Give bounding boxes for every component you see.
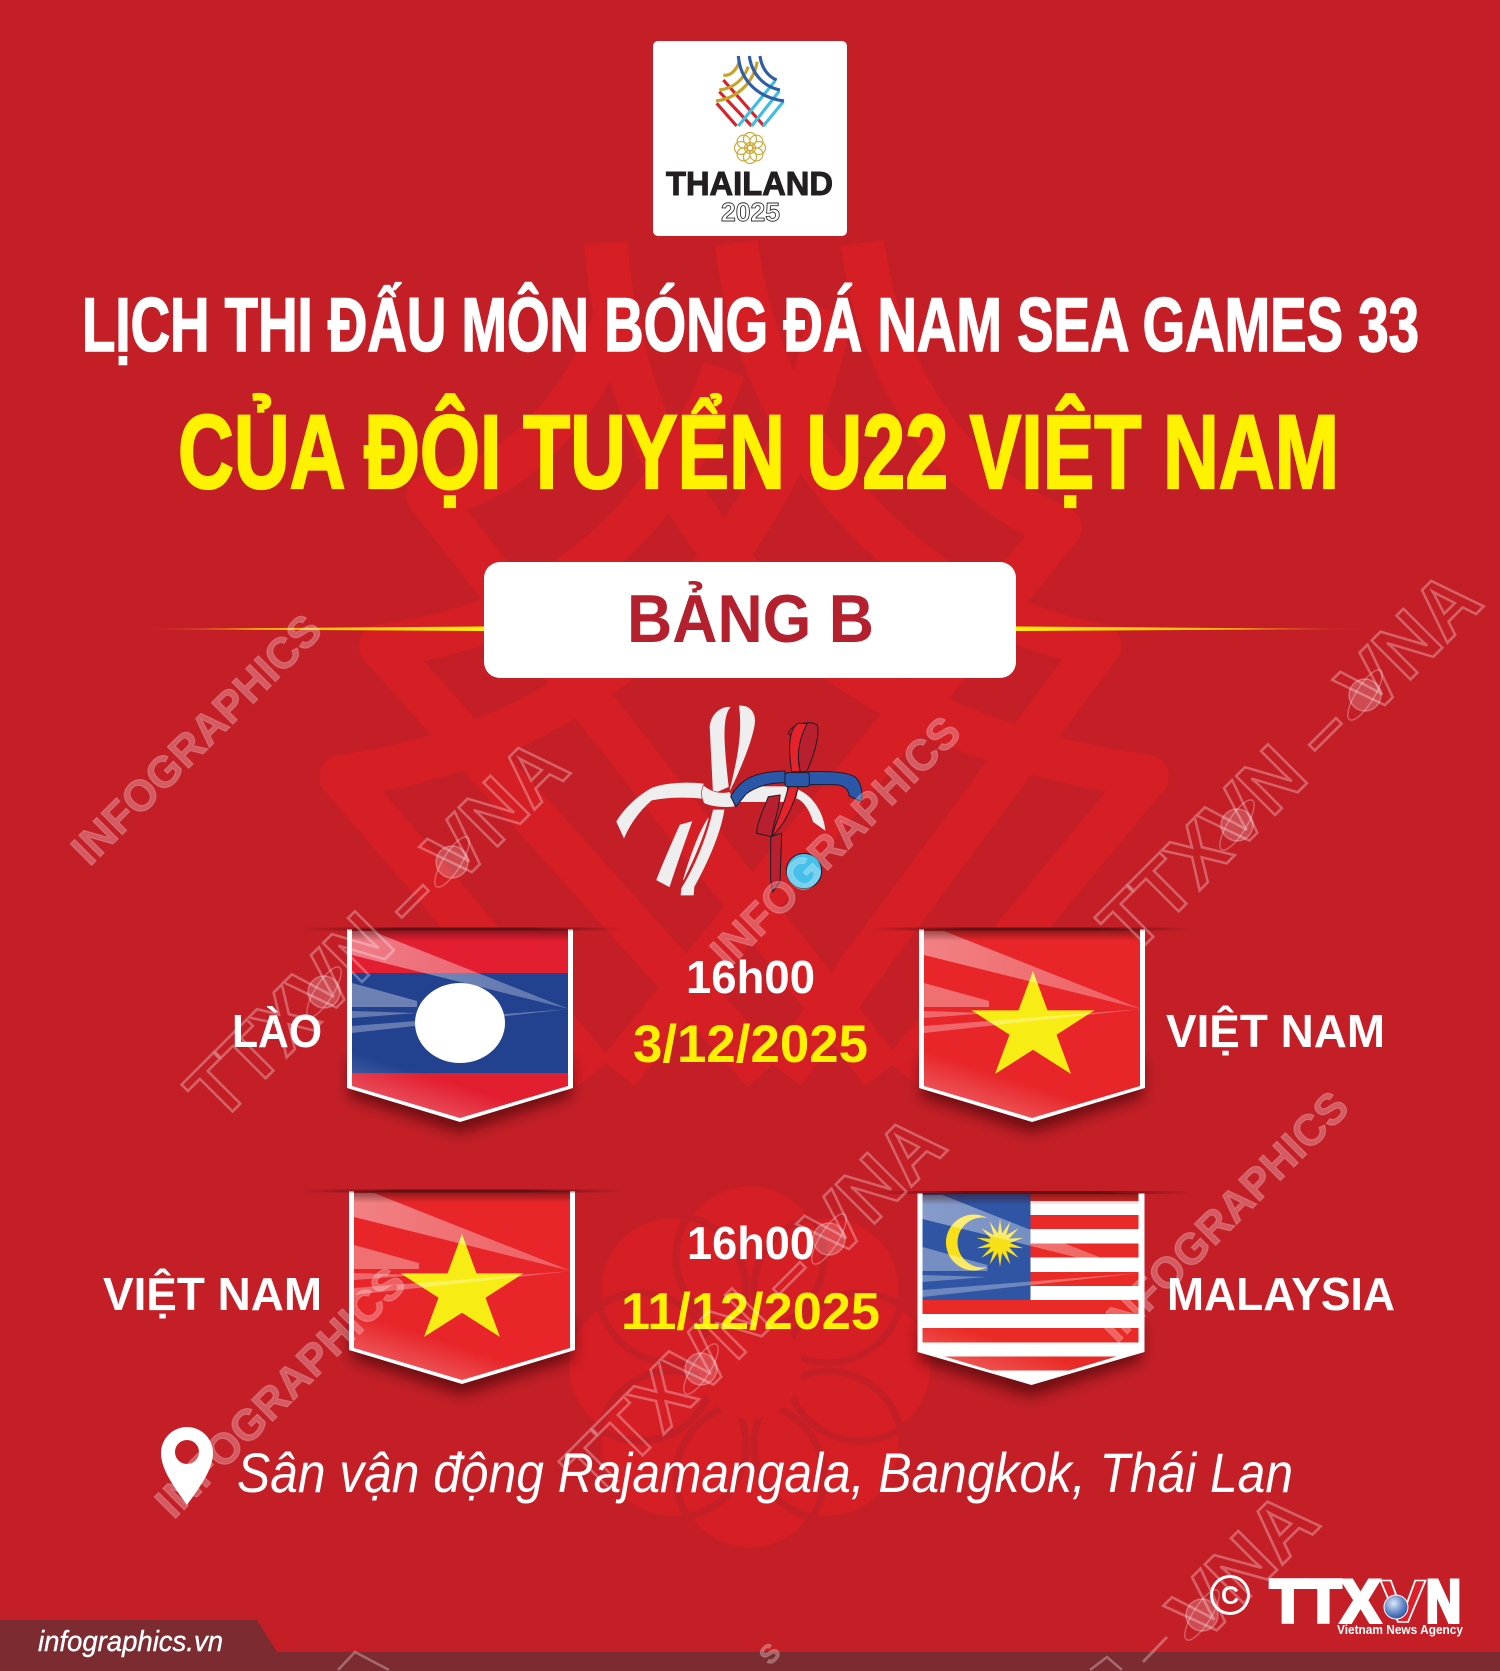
flag hanging rails (300, 928, 1193, 1194)
watermarks: INFOGRAPHICS (62, 605, 331, 874)
match 2: Malaysia flag (918, 1193, 1144, 1397)
logo year: 2025 (721, 197, 780, 227)
match 1: Vietnam flag (919, 929, 1145, 1133)
group heading: Bảng B: BẢNG B (627, 580, 874, 657)
background motif: flower (566, 1183, 934, 1551)
footer site name: infographics.vn (38, 1626, 223, 1658)
TTX letters: TTX (1270, 1568, 1380, 1635)
watermarks: S (753, 1637, 786, 1670)
globe (1384, 1595, 1408, 1619)
match 1: Laos flag (347, 929, 573, 1133)
watermarks: VNA (1151, 1474, 1334, 1657)
background motif: roof lattice emblem (341, 243, 1147, 1072)
copyright mark: C (1221, 1582, 1239, 1610)
footer band (0, 1620, 1500, 1671)
V letter: V (1380, 1568, 1426, 1635)
watermarks: INFOGRAPHICS (701, 707, 970, 976)
icon: chinlone ribbons and ball (617, 706, 862, 895)
group heading: Bảng B (133, 562, 1367, 678)
match 2: date: 11/12/2025 (621, 1283, 880, 1341)
logo emblem (716, 56, 784, 126)
agency tagline: Vietnam News Agency (1337, 1622, 1464, 1637)
logo card: Thailand 2025 (653, 41, 847, 236)
N letter: N (1426, 1568, 1461, 1635)
copyright mark (1212, 1576, 1248, 1614)
match 2: team label Việt Nam: VIỆT NAM (103, 1268, 322, 1320)
agency logo: TTXVN (1212, 1568, 1464, 1637)
match 1: team label Việt Nam: VIỆT NAM (1166, 1005, 1385, 1057)
watermarks: INFOGRAPHICS (146, 1258, 415, 1527)
icon: location pin (161, 1427, 213, 1505)
match 2: kickoff time: 16h00 (687, 1217, 815, 1269)
watermarks: INFOGRAPHICS (1089, 1082, 1358, 1351)
match 1: team label Lào: LÀO (232, 1005, 322, 1057)
match 2: Vietnam flag (349, 1191, 575, 1395)
match 1: kickoff time: 16h00 (686, 951, 815, 1003)
watermarks (62, 554, 1497, 1670)
match 1: date: 3/12/2025 (633, 1015, 868, 1074)
venue text: Sân vận động Rajamangala, Bangkok, Thái Lan (237, 1441, 1293, 1504)
match 2: team label Malaysia: MALAYSIA (1167, 1268, 1395, 1320)
logo wordmark: THAILAND (666, 165, 833, 202)
logo flower (734, 132, 766, 164)
